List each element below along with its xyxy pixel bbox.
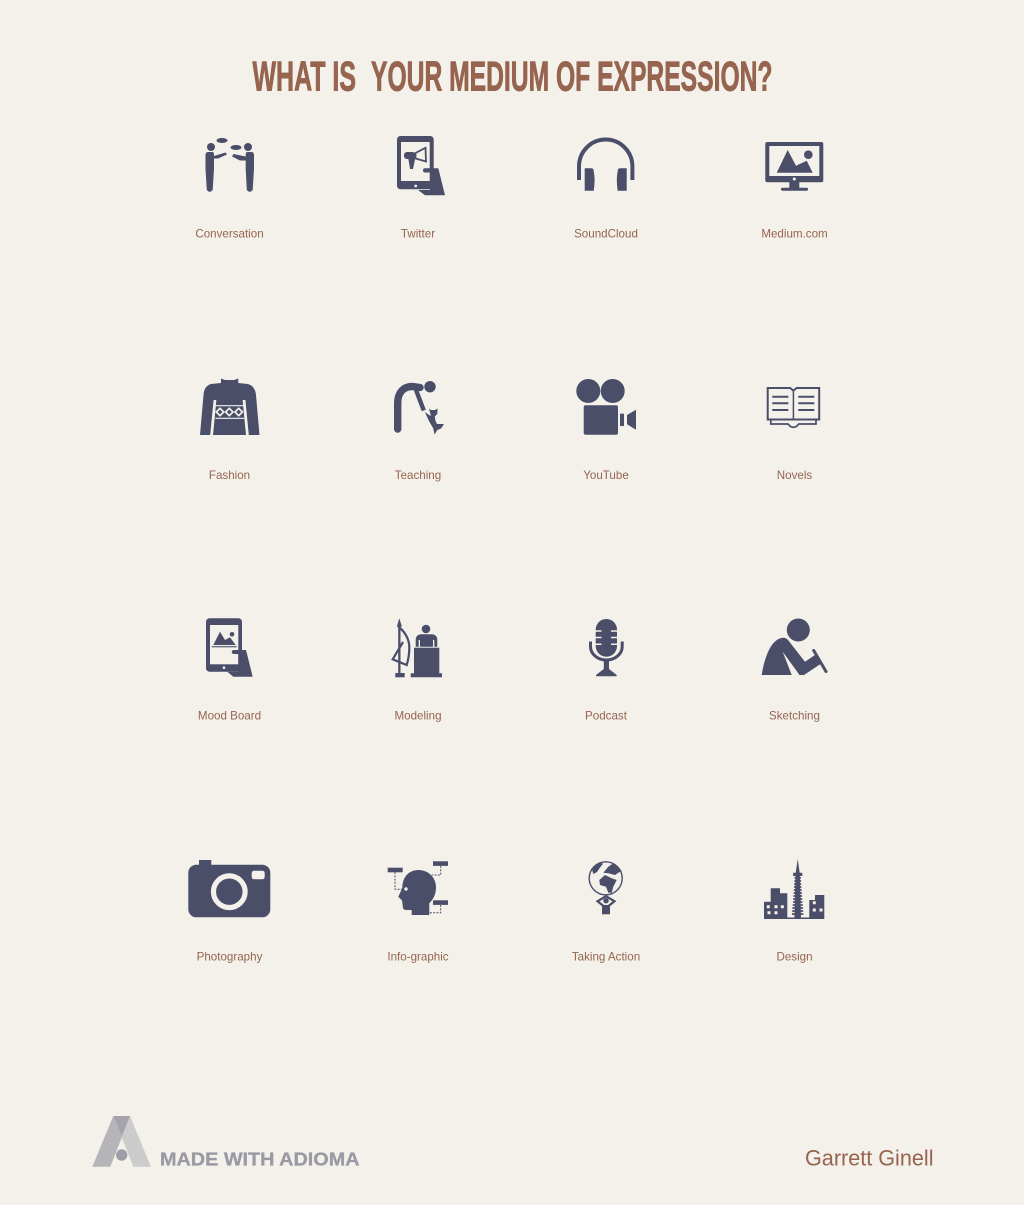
item: Teaching — [395, 381, 444, 482]
label: Podcast: Podcast — [585, 710, 628, 722]
label: Twitter: Twitter — [401, 228, 435, 241]
item: Info-graphic — [387, 861, 449, 964]
item: Modeling — [393, 618, 442, 722]
logo: Adioma mark — [92, 1116, 151, 1167]
item: YouTube — [576, 379, 636, 482]
item: Photography — [188, 860, 270, 964]
icon: person holding globe — [589, 862, 622, 914]
icon: open book — [768, 388, 819, 427]
icon: sweater — [200, 378, 260, 436]
icon: monitor with landscape — [765, 142, 823, 191]
title: WHAT IS — [252, 52, 356, 99]
label: Sketching: Sketching — [769, 710, 820, 722]
label: Taking Action: Taking Action — [572, 951, 640, 964]
item: Mood Board — [198, 618, 261, 722]
icon: camera — [188, 860, 270, 917]
item: Design — [764, 859, 824, 964]
item: Conversation — [195, 138, 264, 241]
icon: head with callouts — [388, 861, 448, 915]
item: Twitter — [397, 136, 445, 241]
label: Fashion: Fashion — [209, 469, 250, 482]
icon: model and sculpture — [393, 618, 442, 677]
label: Teaching: Teaching — [395, 469, 441, 482]
icon: person and cat — [398, 381, 444, 434]
author name: Garrett Ginell — [805, 1146, 934, 1170]
icon: microphone — [590, 619, 622, 676]
icon: headphones — [579, 139, 632, 191]
item: Fashion — [200, 378, 260, 482]
label: YouTube: YouTube — [583, 469, 629, 482]
item: SoundCloud — [574, 139, 638, 241]
label: Conversation: Conversation — [195, 228, 264, 241]
item: Podcast — [585, 619, 628, 722]
label: Design: Design — [776, 951, 813, 964]
icon: person sketching — [762, 618, 826, 675]
item: Novels — [768, 388, 819, 482]
label: Photography: Photography — [197, 951, 263, 964]
title — [252, 52, 772, 99]
icon: city skyline — [764, 859, 824, 919]
item: Sketching — [762, 618, 826, 722]
label: Medium.com: Medium.com — [761, 228, 828, 241]
icon: tablet with megaphone — [397, 136, 445, 195]
label: Info-graphic: Info-graphic — [387, 951, 449, 964]
label: Modeling: Modeling — [394, 710, 442, 722]
item: Medium.com — [761, 142, 828, 241]
item: Taking Action — [572, 862, 640, 964]
icon: conversation — [206, 138, 254, 192]
icon: movie camera — [576, 379, 636, 435]
icon: tablet with picture — [206, 618, 253, 677]
label: Mood Board: Mood Board — [198, 710, 261, 722]
label: SoundCloud: SoundCloud — [574, 228, 638, 241]
label: Novels: Novels — [777, 469, 812, 482]
logo text: MADE WITH ADIOMA — [160, 1150, 360, 1170]
